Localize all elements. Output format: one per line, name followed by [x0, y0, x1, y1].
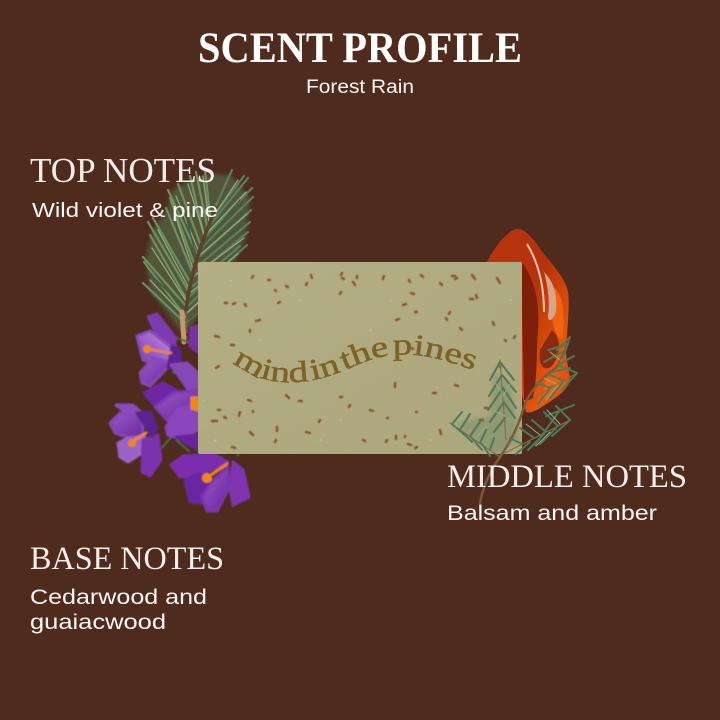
text: middle notes description: Balsam and amber [447, 502, 657, 525]
icon: pine sprig, top [143, 170, 253, 342]
flower: lower [171, 454, 249, 511]
text: top notes description: Wild violet & pine [32, 200, 218, 222]
subtitle: Forest Rain [306, 77, 414, 98]
heading: middle notes: MIDDLE NOTES [447, 459, 687, 495]
text: base notes description: guaiacwood [30, 611, 166, 634]
soap imprint: mind in the pines [232, 335, 476, 383]
flower: left [110, 405, 161, 476]
icon: pine sprig, lower right [450, 337, 577, 503]
icon: amber stone [487, 229, 570, 413]
icon: violet flowers [110, 314, 249, 511]
flower: upper stamen [147, 349, 171, 353]
heading: base notes: BASE NOTES [30, 541, 224, 577]
flower stems [162, 336, 244, 456]
flower: upper [137, 314, 198, 386]
text: base notes description: Cedarwood and [30, 586, 207, 609]
text: base notes description [30, 586, 207, 634]
heading: top notes: TOP NOTES [30, 151, 216, 190]
soap bar [198, 262, 522, 454]
flower: middle [144, 363, 198, 450]
title: SCENT PROFILE [198, 25, 522, 72]
soap speckles [212, 273, 515, 448]
